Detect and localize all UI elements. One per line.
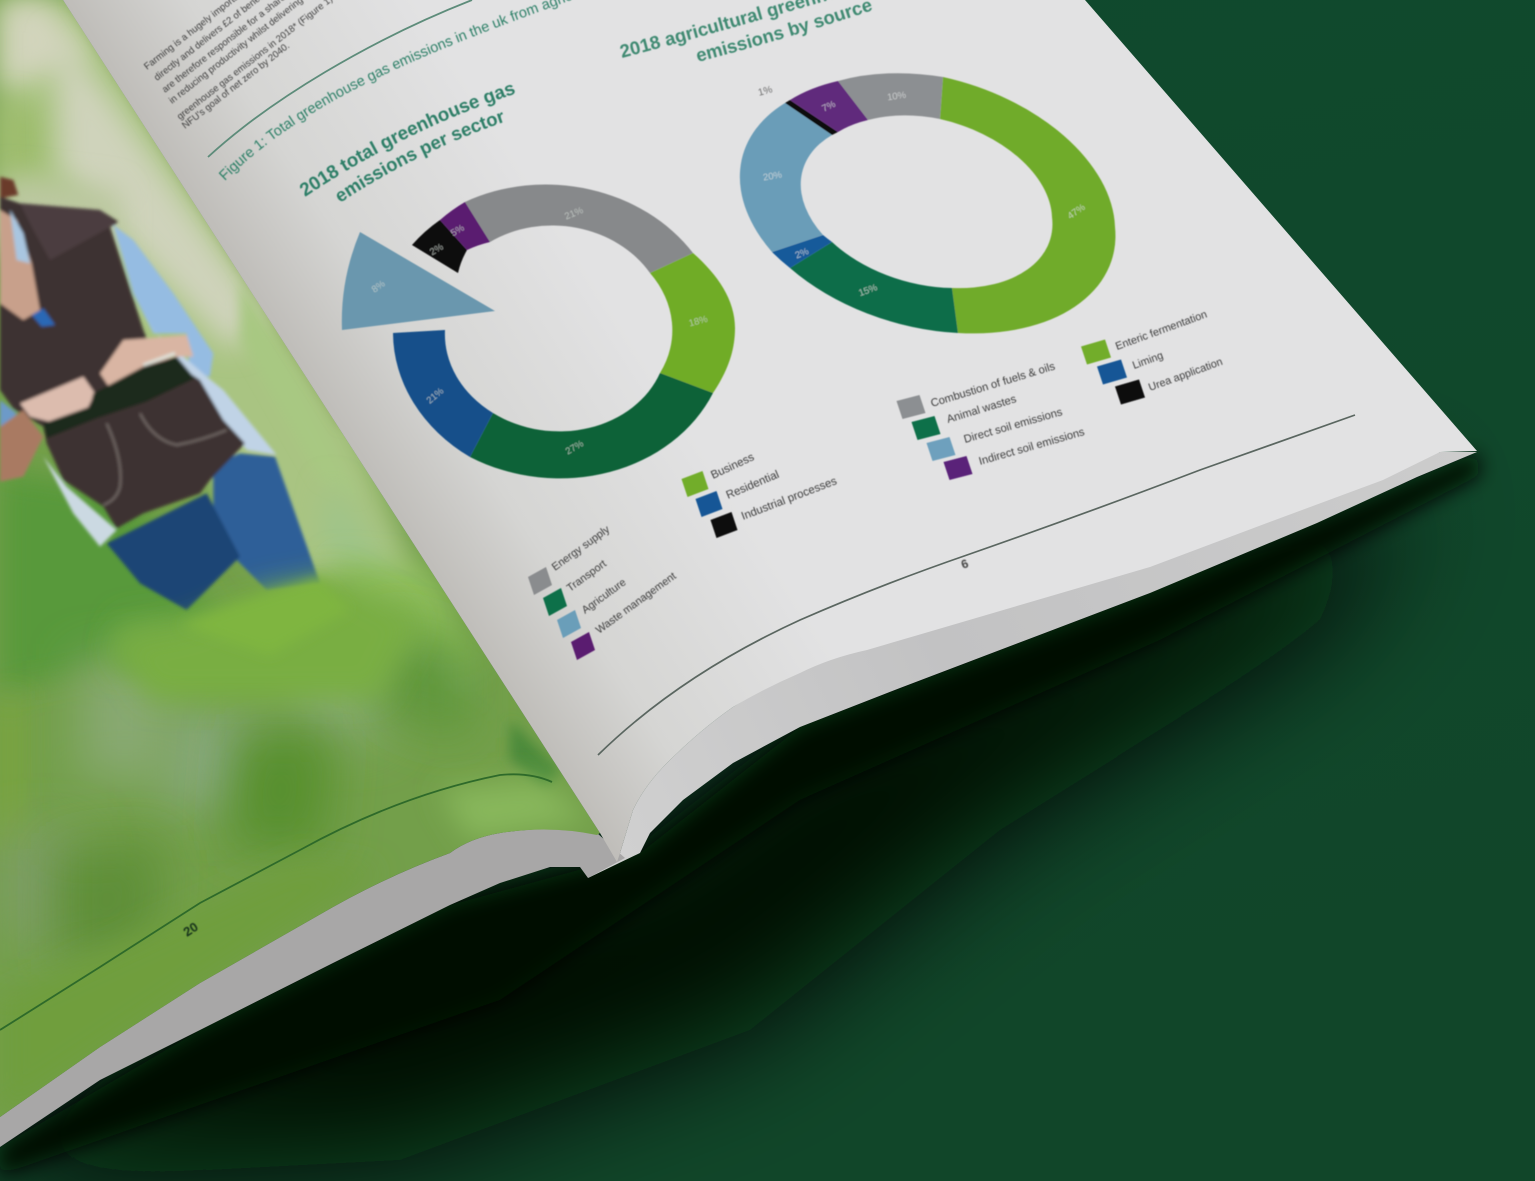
percentage labels: 7%: [820, 99, 838, 115]
donut chart: source: [740, 73, 1115, 333]
slice: liming: [772, 235, 832, 268]
top rule: [208, 0, 472, 157]
legend: source: Indirect soil emissions: [978, 426, 1086, 468]
slice: agriculture exploded: [342, 232, 495, 330]
right page: [63, 0, 1477, 862]
slice: residential: [393, 330, 493, 457]
percentage labels: 27%: [564, 438, 586, 457]
slice: direct soil emissions: [740, 103, 832, 252]
left page footer line: [0, 774, 552, 1030]
right page footer line: [598, 415, 1355, 755]
legend: source: Urea application: [1147, 356, 1224, 394]
slice: transport: [470, 373, 713, 478]
legend: sector: Energy supply: [550, 523, 613, 573]
slice: enteric fermentation: [940, 77, 1115, 333]
slice: urea application: [785, 100, 838, 135]
legend: sector: [528, 451, 839, 660]
panel: agricultural source donut: [620, 0, 1264, 520]
percentage labels: 21%: [563, 205, 585, 222]
page number 20: 20: [180, 919, 201, 940]
percentage labels: [762, 90, 1088, 299]
legend: sector: Industrial processes: [740, 475, 839, 523]
percentage labels: 5%: [449, 222, 467, 239]
donut chart: sector: [342, 185, 735, 478]
percentage labels: 15%: [857, 282, 879, 299]
slice: industrial processes: [412, 220, 467, 273]
woman holding tablet: [0, 177, 320, 610]
heading line two: emissions per sector: [336, 112, 504, 202]
outside label: 1%: [757, 84, 774, 99]
percentage labels: 47%: [1066, 202, 1088, 222]
percentage labels: [370, 205, 709, 457]
book page block edge: [0, 452, 1477, 1147]
legend: sector: Waste management: [594, 570, 679, 636]
slice: energy supply: [465, 185, 693, 273]
legend: source: Enteric fermentation: [1114, 308, 1209, 353]
percentage labels: 18%: [688, 314, 709, 329]
legend: source: Direct soil emissions: [963, 406, 1064, 446]
legend: sector: Business: [709, 451, 756, 482]
heading: total emissions per sector: 2018 total greenhouse gas: [299, 84, 516, 198]
legend: source: Combustion of fuels & oils: [929, 360, 1057, 410]
percentage labels: 21%: [425, 385, 447, 406]
legend: source: Liming: [1131, 350, 1165, 372]
slice: animal wastes: [790, 242, 958, 333]
percentage labels: 20%: [762, 169, 783, 184]
panel: sector donut: [299, 84, 879, 700]
book drop shadow: [0, 452, 1480, 1181]
intro paragraph: NFU's goal of net zero by 2040.: [180, 41, 292, 131]
percentage labels: 2%: [428, 241, 446, 258]
percentage labels: 2%: [794, 246, 811, 261]
slice: combustion: [838, 73, 943, 120]
legend: sector: Agriculture: [580, 576, 629, 616]
photo backdrop: [0, 0, 590, 1120]
left page: photograph of woman in field: [0, 0, 620, 1130]
legend: sector: Residential: [724, 469, 781, 502]
percentage labels: 8%: [370, 278, 388, 295]
legend: source: [896, 308, 1224, 480]
slice: business: [650, 253, 735, 393]
legend: source: Animal wastes: [945, 393, 1018, 426]
percentage labels: 10%: [886, 90, 907, 103]
page number 6: 6: [959, 556, 971, 572]
foreground grass blur: [110, 575, 420, 700]
legend: sector: Transport: [565, 558, 609, 594]
slice: indirect soil emissions: [790, 81, 868, 132]
slice: waste management: [440, 202, 490, 250]
